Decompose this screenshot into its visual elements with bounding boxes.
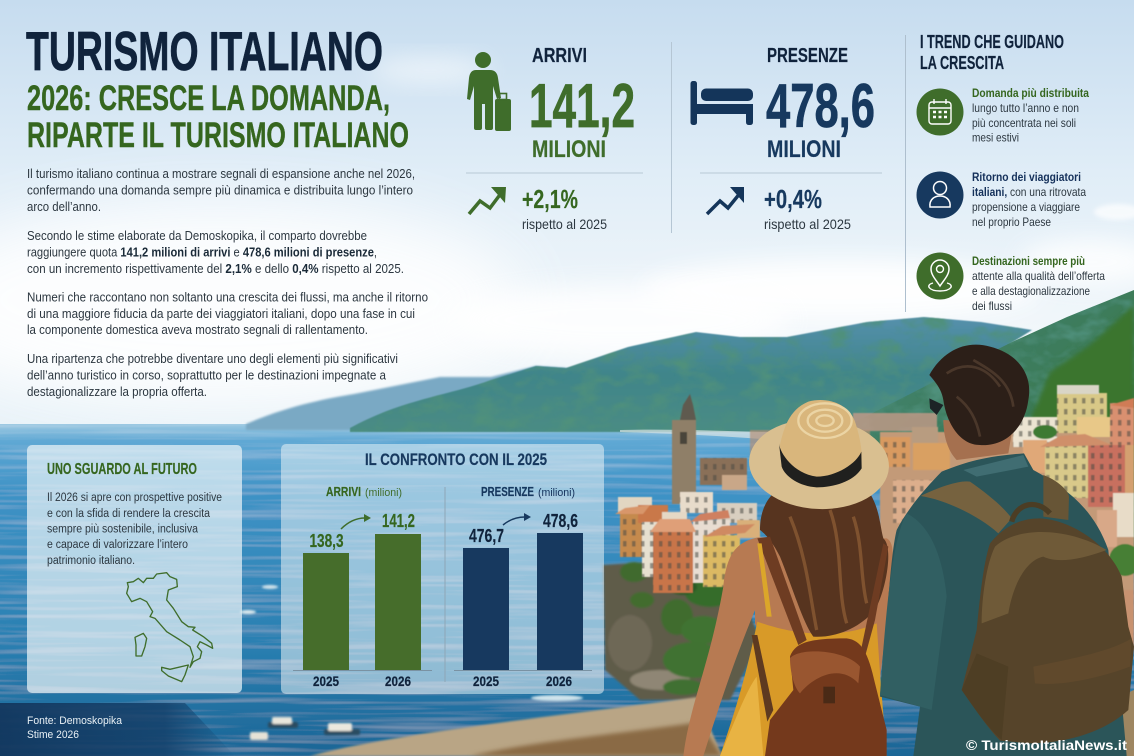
bar chart: arrivi: 141,2 (382, 511, 415, 531)
bar chart: arrivi: 2026 (385, 673, 411, 689)
intro text: dell’anno turistico in corso, soprattutto per le destinazioni impegnate a (27, 368, 387, 382)
trend 1 text: più concentrata nei soli (972, 116, 1076, 130)
trend 2 text (972, 170, 1086, 229)
icon: traveller with suitcase (467, 52, 511, 131)
intro text: di una maggiore fiducia da parte dei viaggiatori italiani, dopo una fase in cui (27, 306, 415, 321)
bar chart: arrivi: 2025 (313, 673, 339, 689)
woman's backpack (765, 638, 887, 756)
future text: e capace di valorizzare l’intero (47, 539, 188, 551)
main title: 2026: CRESCE LA DOMANDA, (27, 79, 390, 118)
trend 2 text: Ritorno dei viaggiatori (972, 170, 1081, 184)
stat: presenze: PRESENZE (767, 45, 848, 67)
trend 1 text (972, 86, 1089, 144)
icon: green growth arrow (469, 187, 506, 214)
coastal town (615, 385, 1134, 650)
panel: il confronto con il 2025 (281, 444, 604, 694)
divider between stats (671, 42, 672, 233)
intro text: destagionalizzare la propria offerta. (27, 384, 207, 399)
main title: TURISMO ITALIANO (26, 20, 383, 82)
trend 1 text: Domanda più distribuita (972, 86, 1089, 100)
trend 3 text: e alla destagionalizzazione (972, 284, 1090, 298)
cliff and vegetation (603, 560, 760, 700)
woman (683, 493, 893, 756)
straw hat (747, 400, 891, 513)
icon: navy growth arrow (707, 187, 744, 214)
main title (26, 20, 409, 155)
panel: uno sguardo al futuro: UNO SGUARDO AL FUTURO (47, 461, 197, 478)
arrow: presenze increase (503, 513, 531, 525)
stat: presenze: MILIONI (767, 136, 841, 163)
intro text: confermando una domanda sempre più dinamica e distribuita lungo l’intero (27, 182, 413, 198)
bar chart: arrivi: 138,3 (310, 531, 344, 551)
couple of tourists seen from behind (683, 345, 1134, 756)
bar chart: arrivi: (milioni) (365, 487, 402, 499)
icon: map of Italy (127, 573, 213, 682)
trend 1 text: mesi estivi (972, 130, 1019, 144)
trend 3 text (972, 254, 1105, 313)
stat: arrivi (466, 45, 643, 232)
bar chart: presenze: (milioni) (538, 487, 575, 499)
stat: presenze: rispetto al 2025 (764, 216, 851, 232)
icon: bed (690, 81, 753, 125)
intro text (27, 166, 428, 399)
source note: Fonte: Demoskopika (27, 715, 123, 727)
source note (27, 715, 123, 741)
bar chart: presenze: 478,6 (543, 511, 578, 531)
icon: calendar (916, 88, 964, 136)
stat: arrivi: MILIONI (532, 136, 606, 163)
trend 3 text: dei flussi (972, 299, 1012, 313)
bar chart: presenze (454, 484, 592, 689)
stat: arrivi: +2,1% (522, 184, 578, 214)
distant mountains (246, 366, 640, 430)
icon: person (916, 172, 964, 218)
future text: e con la sfida di rendere la crescita (47, 508, 211, 520)
man (880, 345, 1127, 756)
main title: RIPARTE IL TURISMO ITALIANO (27, 116, 409, 155)
intro text: con un incremento rispettivamente del 2,1% e dello 0,4% rispetto al 2025. (27, 261, 404, 276)
stone wall (310, 697, 722, 756)
bar chart: presenze: 2025 (473, 673, 499, 689)
icon: map pin (916, 252, 964, 300)
trend 2 text: nel proprio Paese (972, 215, 1051, 229)
trend 3 text: Destinazioni sempre più (972, 254, 1085, 268)
intro text: raggiungere quota 141,2 milioni di arrivi e 478,6 milioni di presenze, (27, 244, 377, 260)
stat: presenze: 478,6 (766, 72, 875, 141)
bar chart: arrivi: ARRIVI (326, 484, 361, 499)
right town (880, 432, 1134, 612)
watermark: © TurismoItaliaNews.it (966, 737, 1127, 753)
arrow: arrivi increase (341, 514, 371, 529)
intro text: arco dell’anno. (27, 199, 101, 214)
trends heading (920, 32, 1064, 73)
intro text: Numeri che raccontano non soltanto una crescita dei flussi, ma anche il ritorno (27, 290, 428, 304)
trend 2 text: italiani, con una ritrovata (972, 185, 1086, 199)
panel: il confronto con il 2025: IL CONFRONTO CON IL 2025 (365, 450, 547, 469)
trend 2 text: propensione a viaggiare (972, 200, 1080, 214)
intro text: la componente domestica aveva mostrato segnali di rallentamento. (27, 322, 368, 337)
bar chart: arrivi (293, 484, 432, 689)
source note: Stime 2026 (27, 729, 79, 741)
future text: sempre più sostenibile, inclusiva (47, 524, 199, 536)
future text: Il 2026 si apre con prospettive positive (47, 492, 222, 504)
sea (0, 424, 1134, 756)
intro text: Il turismo italiano continua a mostrare segnali di espansione anche nel 2026, (27, 166, 415, 181)
trend 1 text: lungo tutto l’anno e non (972, 101, 1079, 115)
stat: arrivi: 141,2 (529, 72, 635, 141)
stat: arrivi: rispetto al 2025 (522, 216, 607, 232)
right hill (820, 290, 1134, 560)
bar chart: presenze: 2026 (546, 673, 572, 689)
man's backpack (921, 475, 1134, 743)
distant town (853, 413, 937, 431)
future text (47, 492, 222, 567)
stat: arrivi: ARRIVI (532, 45, 587, 67)
stat: presenze (690, 45, 882, 232)
panel: uno sguardo al futuro (27, 445, 242, 693)
trends heading: I TREND CHE GUIDANO (920, 32, 1064, 52)
bar chart: presenze: 476,7 (469, 526, 504, 546)
trends heading: LA CRESCITA (920, 53, 1004, 73)
boats (240, 585, 583, 740)
future text: patrimonio italiano. (47, 555, 135, 567)
panel: trends (905, 32, 1105, 313)
bar chart: presenze: PRESENZE (481, 484, 534, 499)
intro text: Secondo le stime elaborate da Demoskopika, il comparto dovrebbe (27, 228, 367, 243)
stat: presenze: +0,4% (764, 184, 822, 214)
intro text: Una ripartenza che potrebbe diventare uno degli elementi più significativi (27, 351, 398, 366)
footer band (0, 703, 235, 756)
trend 3 text: attente alla qualità dell’offerta (972, 269, 1105, 283)
